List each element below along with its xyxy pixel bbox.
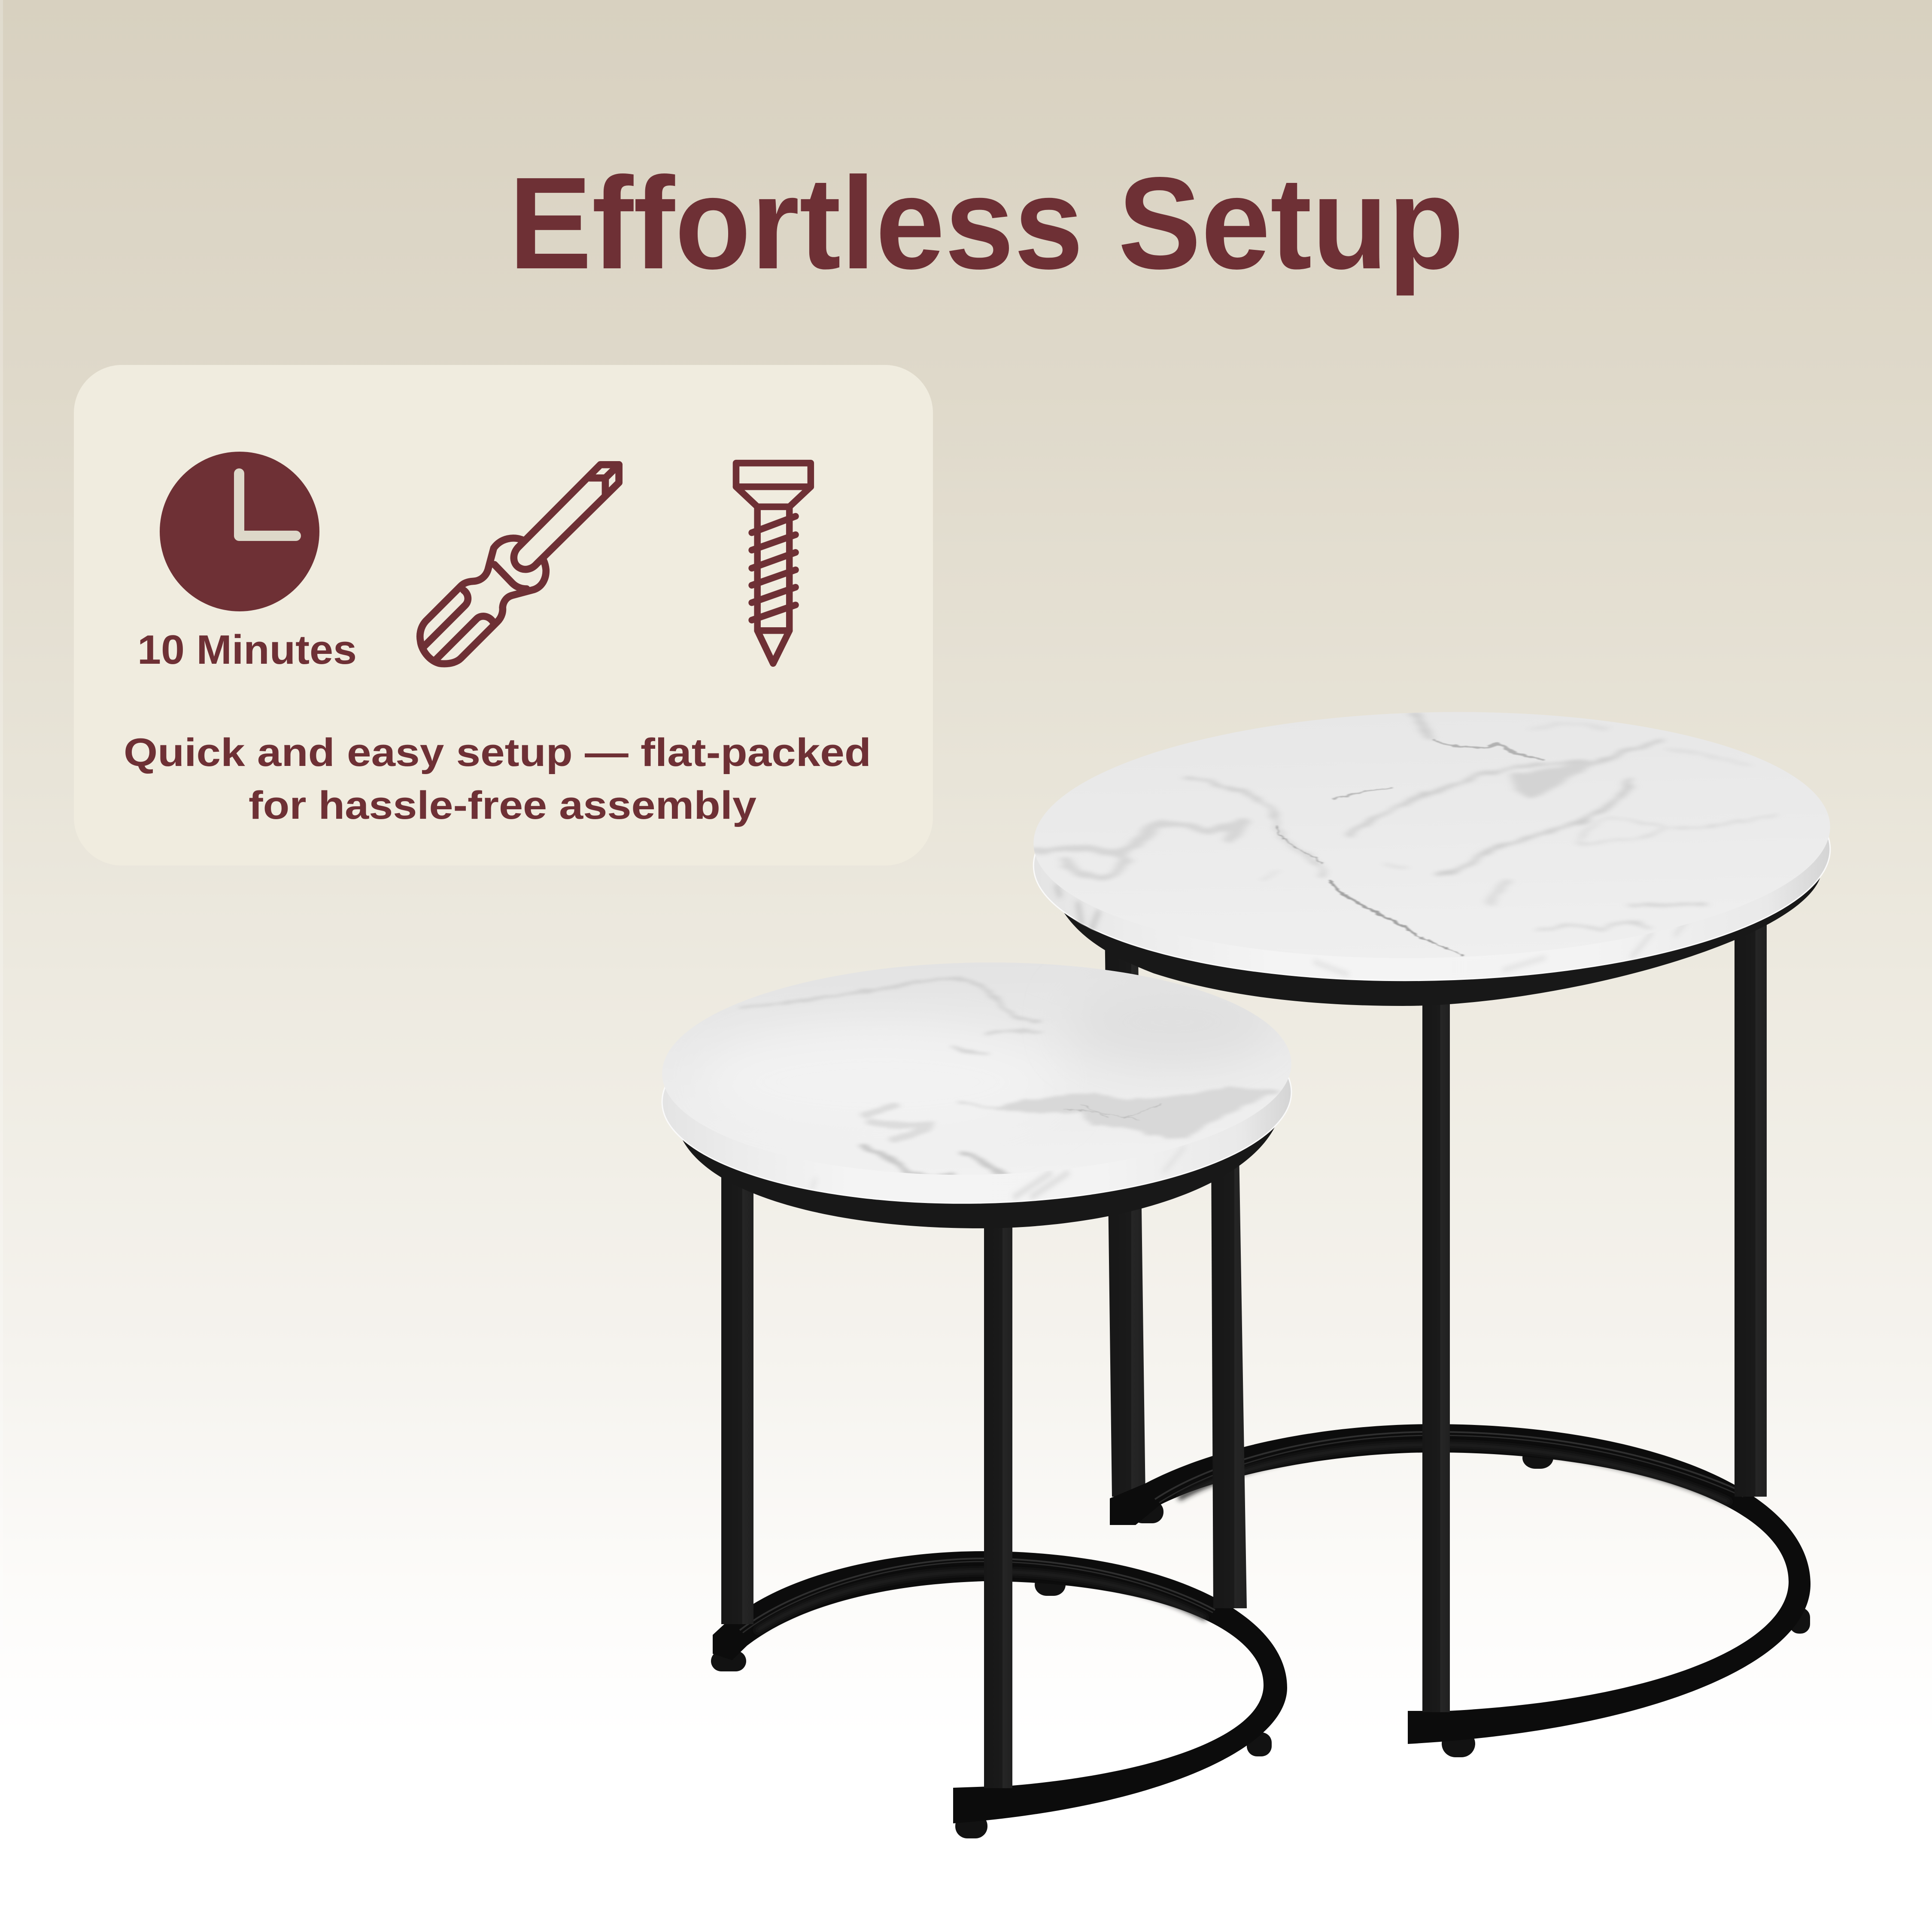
small table base ring [713,1551,1287,1823]
small table front leg [984,1202,1012,1788]
description text [124,731,871,827]
marble veins large [1036,714,1776,956]
large table marble top [1031,703,1833,967]
small table right leg [1211,1151,1247,1608]
small table feet [711,1574,1272,1838]
large table apron [1048,867,1822,1006]
marble veins small [740,978,1279,1177]
label: 10 minutes: 10 Minutes [137,627,357,673]
small table left leg [721,1138,753,1624]
description text: for hassle-free assembly [249,784,756,827]
large table back leg [1105,923,1145,1497]
icon: clock [160,452,319,611]
description text: Quick and easy setup — flat-packed [124,731,871,775]
title: Effortless Setup [509,150,1464,297]
large table feet [1131,1447,1810,1757]
large table front leg [1422,966,1450,1712]
small table rim [661,1077,1292,1204]
large table right leg [1735,902,1767,1497]
small table marble top [660,957,1293,1180]
large table base ring [1110,1424,1810,1744]
large table rim [1033,837,1831,981]
icon: screw [736,463,811,663]
small table apron [675,1095,1283,1228]
large table [1031,703,1833,1757]
small table [660,957,1293,1838]
panel: setup info [74,365,933,866]
icon: screwdriver [420,465,619,664]
